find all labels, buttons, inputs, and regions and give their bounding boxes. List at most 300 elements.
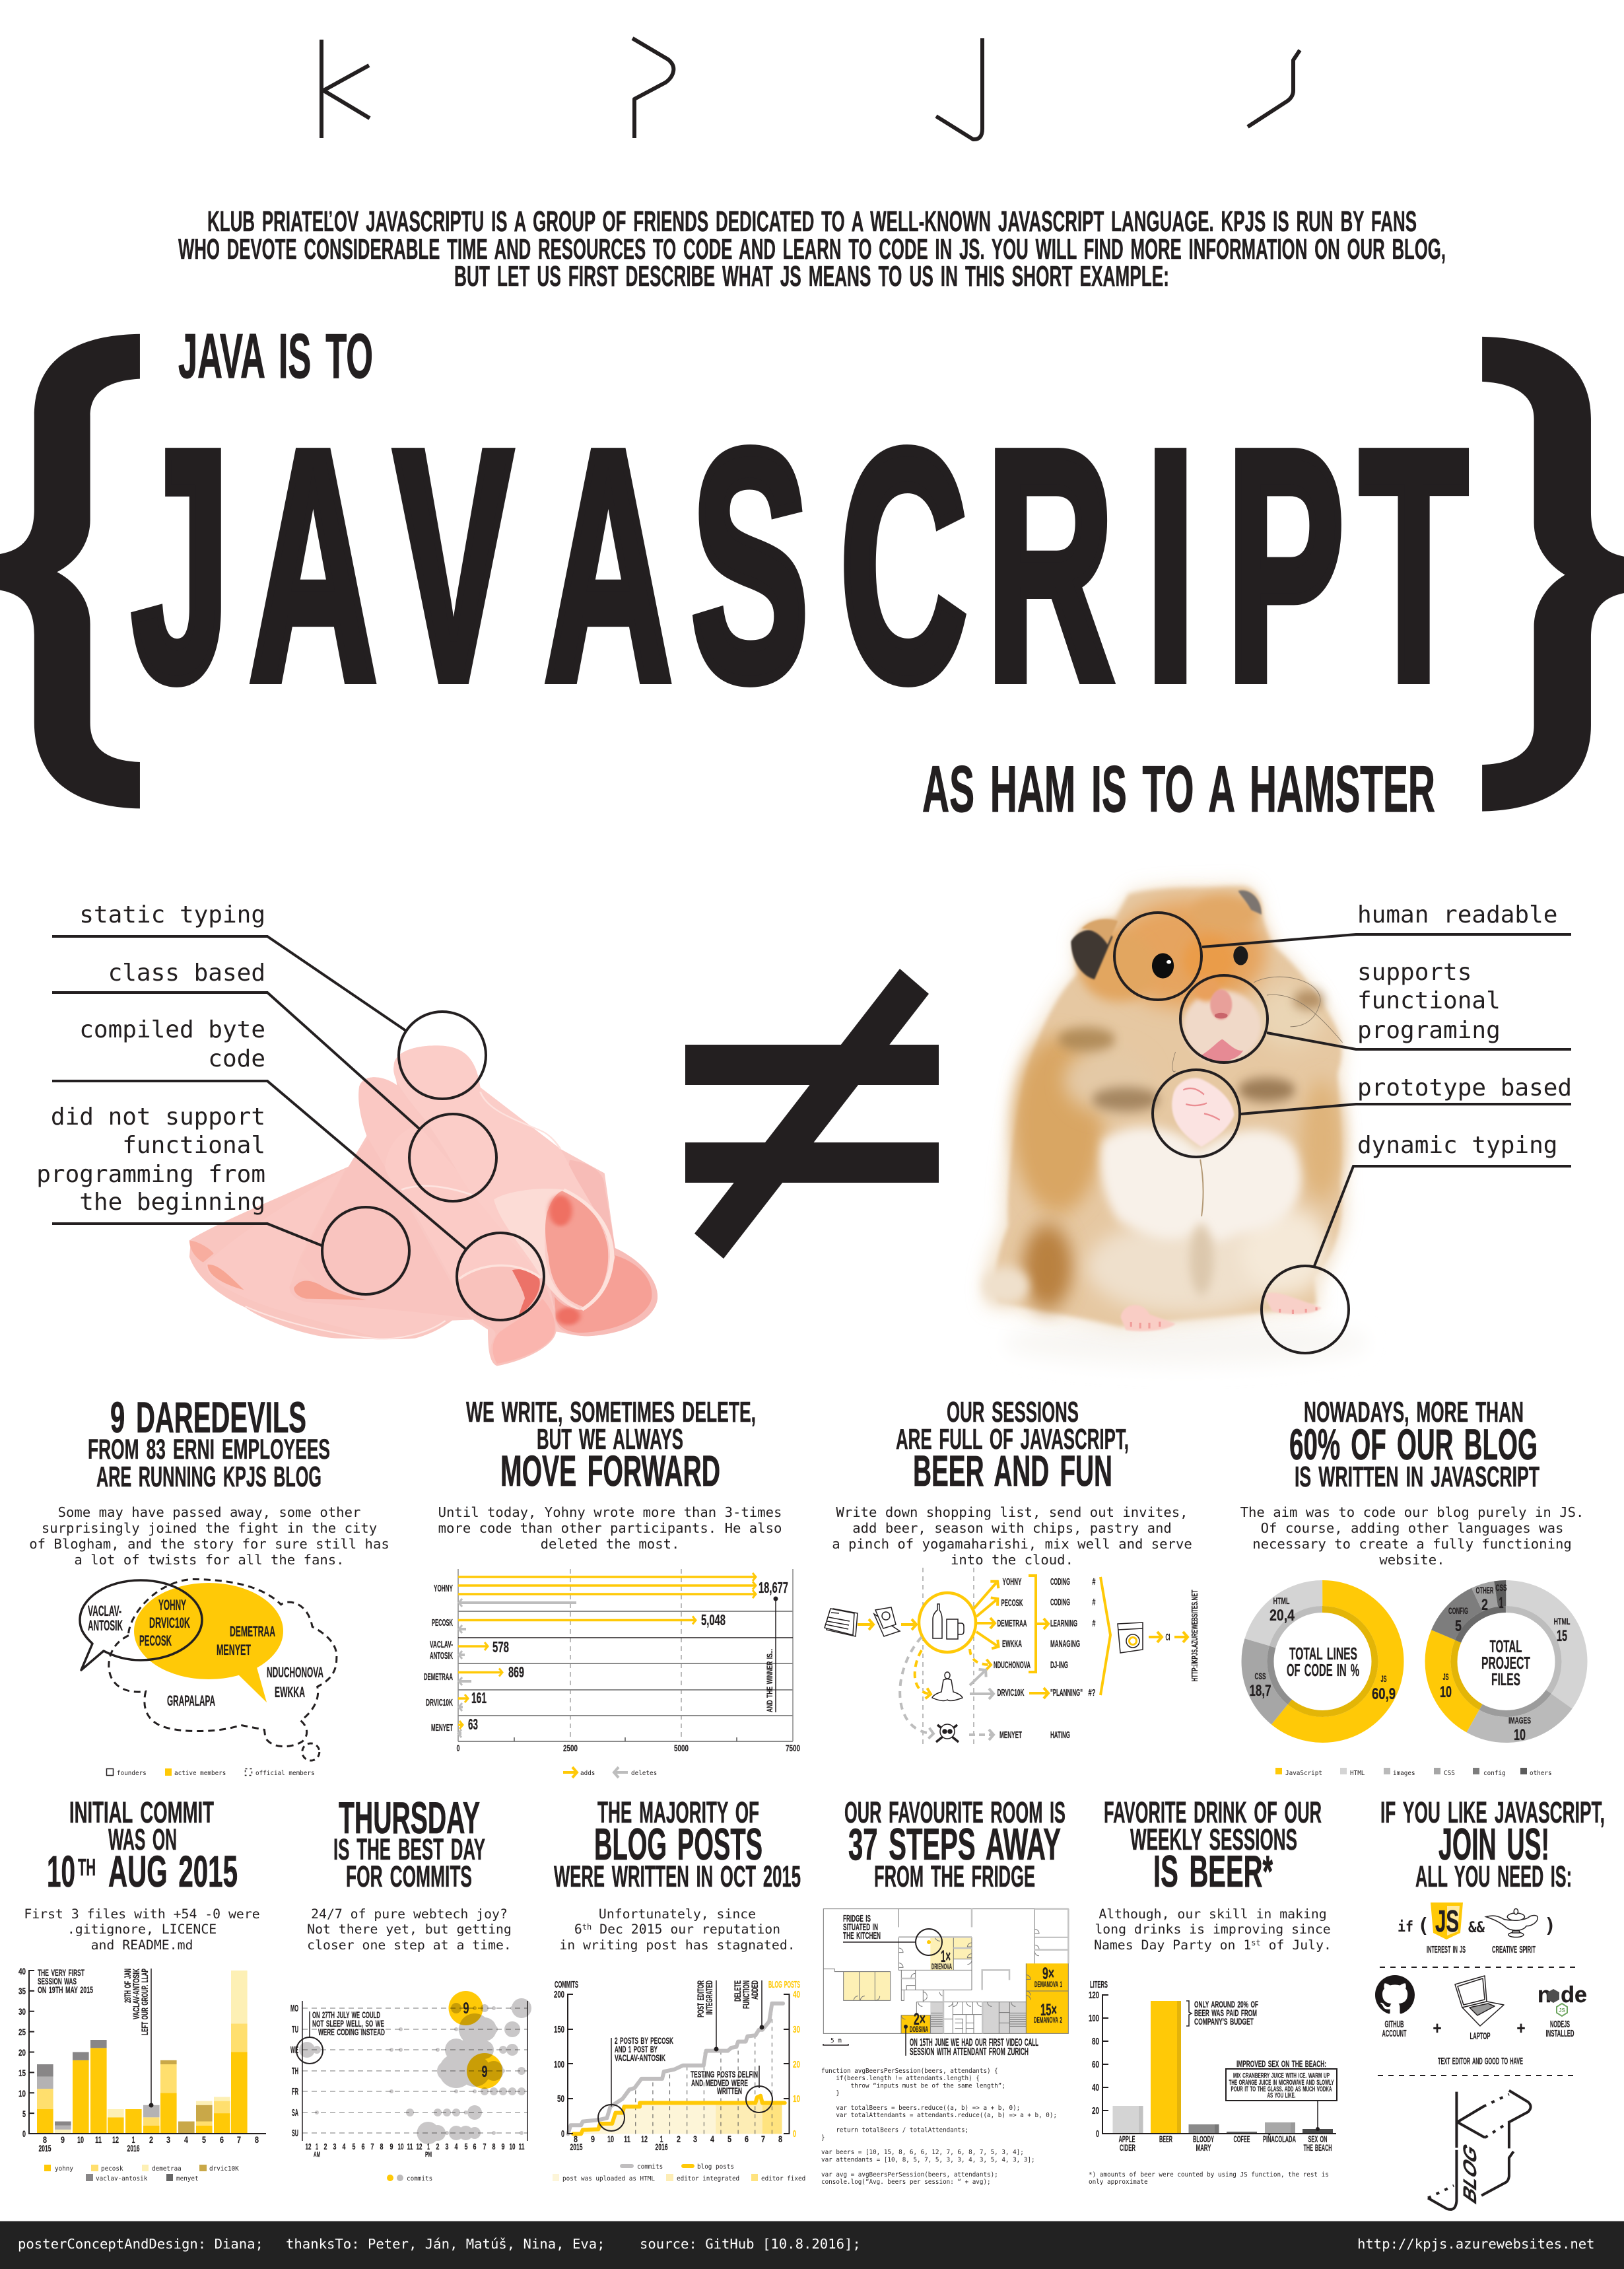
text block: Unfortunately, since	[599, 1906, 756, 1922]
annotation: testing posts	[691, 2066, 772, 2112]
stacked bar chart: monthly commits: 8	[43, 2134, 47, 2145]
flow diagram: session workflow: PECOSK	[1001, 1598, 1023, 1609]
bar chart: adds and deletes: DEMETRAA	[424, 1672, 453, 1683]
stacked bar chart: monthly commits: 40	[18, 1966, 26, 1976]
bar chart: liters per drink: MARY	[1196, 2142, 1211, 2153]
annotation: 2 posts by pecosk: VACLAV-ANTOSIK	[615, 2052, 665, 2063]
donut chart: total project files: 2	[1481, 1596, 1488, 1614]
callout: supports functional programing: functional	[1357, 987, 1501, 1014]
requirement: github laptop node: INSTALLED	[1546, 2028, 1574, 2039]
requirement: js and creative spirit: CREATIVE SPIRIT	[1492, 1944, 1536, 1955]
text block: Although, our skill in making	[1099, 1906, 1327, 1922]
annotation: testing posts: WRITTEN	[717, 2085, 742, 2096]
callout: improved sex on the beach	[1226, 2058, 1337, 2131]
annotation: company budget: ONLY AROUND 20% OF	[1194, 1999, 1258, 2009]
callout: supports functional programing: supports	[1357, 959, 1472, 986]
floor plan: DEMANOVA 1	[1034, 1980, 1062, 1989]
panel: thursday	[290, 1793, 531, 2182]
text block: The aim was to code our blog purely in JS.	[1240, 1504, 1584, 1520]
venn diagram: members: EWKKA	[275, 1684, 305, 1700]
logo: KPJS blog isometric	[1428, 2091, 1531, 2210]
line chart: commits and blog posts: 10	[793, 2093, 800, 2105]
requirement: js and creative spirit: INTEREST IN JS	[1427, 1944, 1466, 1955]
legend: blog posts	[553, 2163, 805, 2182]
heading: THE MAJORITY OF	[597, 1796, 759, 1829]
donut chart: total project files: JS	[1443, 1671, 1448, 1682]
flow diagram: session workflow: NDUCHONOVA	[994, 1660, 1031, 1671]
stacked bar chart: monthly commits: 2016	[127, 2143, 140, 2153]
stacked bar chart: monthly commits: 5	[202, 2134, 206, 2145]
donut chart: total project files: TOTAL	[1489, 1636, 1522, 1656]
stacked bar chart: monthly commits: 7	[237, 2134, 241, 2145]
text block: into the cloud.	[951, 1552, 1073, 1568]
text block: th	[582, 1922, 592, 1932]
stacked bar chart: monthly commits: 2015	[38, 2143, 51, 2153]
floor plan: 15×	[1040, 2001, 1057, 2019]
bar chart: adds and deletes: VACLAV-	[430, 1640, 453, 1650]
callout: improved sex on the beach: POUR IT TO THE GLASS. ADD AS MUCH VODKA	[1231, 2085, 1332, 2093]
donut chart: total lines of code: 20,4	[1269, 1607, 1295, 1624]
line chart: commits and blog posts: 40	[793, 1989, 800, 2000]
bar chart: liters per drink: BEER	[1159, 2134, 1172, 2144]
bubble chart: commits by hour: 5	[465, 2142, 467, 2151]
text block: necessary to create a fully functioning	[1252, 1536, 1572, 1552]
line chart: commits and blog posts: 0	[561, 2128, 564, 2140]
floor plan: SITUATED IN	[843, 1922, 878, 1933]
flow diagram: session workflow: HATING	[1050, 1730, 1070, 1741]
callout: compiled byte code: compiled byte	[79, 1016, 265, 1043]
line chart: commits and blog posts: 5	[727, 2134, 731, 2144]
flow diagram: session workflow: CODING	[1050, 1577, 1070, 1588]
illustration: hamster	[982, 886, 1369, 1365]
footer bar: source: GitHub [10.8.2016];	[640, 2236, 861, 2252]
legend: members: demetraa	[152, 2165, 182, 2173]
text block: .gitignore, LICENCE	[67, 1922, 217, 1937]
icon: JS shield: JS	[1435, 1904, 1459, 1938]
text block: website.	[1379, 1552, 1445, 1568]
callout: dynamic typing: dynamic typing	[1357, 1132, 1557, 1159]
code block	[821, 2068, 1057, 2186]
heading: THURSDAY	[339, 1793, 480, 1843]
text block: Not there yet, but getting	[307, 1922, 512, 1937]
bubble chart: commits by hour: TU	[292, 2024, 298, 2035]
annotation: delete function added: DELETE	[732, 1980, 743, 2002]
donut chart: total project files: HTML	[1554, 1616, 1571, 1626]
icon: meditation	[932, 1672, 963, 1700]
right curly brace	[1482, 337, 1624, 812]
panel: 60% of our blog	[1240, 1396, 1584, 1777]
ham callouts	[36, 901, 544, 1320]
flow diagram: session workflow: DRVIC10K	[997, 1688, 1025, 1698]
floor plan: 1×	[941, 1947, 951, 1966]
legend: languages: others	[1530, 1770, 1552, 1777]
bar chart: liters per drink: SEX ON	[1308, 2134, 1327, 2144]
heading: WAS ON	[108, 1823, 177, 1856]
heading: ARE FULL OF JAVASCRIPT,	[896, 1423, 1129, 1455]
legend: blog posts: blog posts	[697, 2163, 734, 2171]
callout: compiled byte code: code	[208, 1045, 265, 1072]
annotation: vaclav left: 28TH OF JAN	[122, 1969, 133, 2003]
line chart: commits and blog posts: 150	[554, 2024, 564, 2035]
annotation: 27th july: NOT SLEEP WELL, SO WE	[312, 2018, 384, 2029]
heading	[1380, 1796, 1605, 1893]
legend: languages: JavaScript	[1285, 1770, 1322, 1777]
bubble chart: commits by hour: 11	[407, 2142, 413, 2151]
callout: prototype based: prototype based	[1357, 1074, 1572, 1101]
bubble chart: commits by hour: 5	[353, 2142, 355, 2151]
bar chart: liters per drink: COFEE	[1233, 2134, 1250, 2144]
line chart: commits and blog posts: 2	[677, 2134, 681, 2144]
bar chart: adds and deletes: 869	[508, 1663, 524, 1681]
stacked bar chart: monthly commits: 30	[18, 2006, 26, 2017]
bar chart: adds and deletes: 18,677	[759, 1579, 788, 1596]
line chart: commits and blog posts: 11	[624, 2134, 630, 2144]
donut chart: total lines of code: 60,9	[1372, 1685, 1396, 1703]
intro text	[178, 205, 1446, 293]
panel: blog posts: BLOG POSTS	[768, 1979, 800, 1990]
text block: st	[1251, 1938, 1261, 1947]
flow diagram: session workflow: #?	[1088, 1688, 1096, 1698]
requirement: js and creative spirit	[1398, 1902, 1556, 1955]
callout: did not support functional programming: programming from	[36, 1161, 265, 1188]
line chart: commits and blog posts: 12	[641, 2134, 648, 2144]
bubble chart: commits by hour: 3	[333, 2142, 337, 2151]
floor plan: DRIENOVA	[931, 1962, 952, 1971]
flow diagram: session workflow: #	[1092, 1619, 1096, 1629]
stacked bar chart: monthly commits: 35	[18, 1986, 26, 1996]
footer bar: posterConceptAndDesign: Diana;	[18, 2236, 263, 2252]
heading: IS BEER*	[1153, 1846, 1273, 1897]
donut chart: total lines of code: HTML	[1273, 1595, 1290, 1606]
text block: more code than other participants. He also	[438, 1520, 782, 1536]
annotation: vaclav left: VACLAV-ANTOSIK	[131, 1969, 141, 2019]
stacked bar chart: monthly commits: 3	[166, 2134, 170, 2145]
text block: 6	[574, 1922, 582, 1937]
venn diagram: members: PECOSK	[139, 1632, 172, 1649]
bar chart: liters per drink: 0	[1096, 2128, 1099, 2140]
bubble chart: commits by hour: 4	[342, 2142, 346, 2151]
callout: did not support functional programming: did not support	[51, 1103, 265, 1131]
legend: adds and deletes: adds	[580, 1770, 595, 1777]
text block	[832, 1504, 1192, 1568]
bubble chart: commits by hour: TH	[292, 2066, 298, 2077]
legend: members: official members	[255, 1770, 315, 1777]
line chart: commits and blog posts: 20	[793, 2059, 800, 2070]
heading: 37 STEPS AWAY	[848, 1819, 1061, 1869]
line chart: commits and blog posts: 2016	[655, 2142, 668, 2152]
donut chart: total project files: 10	[1440, 1683, 1452, 1701]
venn diagram: members: MENYET	[217, 1642, 251, 1658]
callout: compiled byte code	[52, 1016, 544, 1320]
callout: class based	[52, 960, 496, 1201]
donut chart: total lines of code: 18,7	[1249, 1682, 1271, 1700]
bar chart: adds and deletes: 0	[457, 1743, 460, 1753]
heading	[844, 1796, 1066, 1893]
text block	[559, 1906, 795, 1953]
bar chart: adds and deletes: 63	[468, 1716, 478, 1733]
stacked bar chart: monthly commits: 11	[95, 2134, 102, 2145]
donut chart: total project files: 1	[1499, 1594, 1504, 1612]
venn diagram: members: GRAPALAPA	[167, 1693, 215, 1709]
floor plan: FRIDGE IS	[843, 1913, 871, 1924]
bubble chart: commits by hour: WE	[290, 2044, 298, 2056]
annotation: post editor integrated	[695, 1980, 718, 2051]
icon: github	[1375, 1975, 1415, 2014]
requirement: github laptop node: ACCOUNT	[1382, 2028, 1406, 2039]
bubble chart: commits by hour: 1	[427, 2142, 430, 2151]
bar chart: adds and deletes: 5,048	[701, 1611, 726, 1628]
bar chart: adds and deletes: 5000	[674, 1743, 689, 1753]
legend: members: menyet	[176, 2175, 199, 2182]
requirement: github laptop node: LAPTOP	[1470, 2031, 1491, 2042]
text block: a lot of twists for all the fans.	[74, 1552, 345, 1568]
bubble chart: commits by hour: 7	[483, 2142, 486, 2151]
heading: FROM THE FRIDGE	[874, 1860, 1035, 1893]
floor plan: THE KITCHEN	[843, 1930, 881, 1941]
icon: node logo: n de	[1538, 1982, 1587, 2007]
logo: KPJS letterforms	[321, 38, 1300, 139]
text block	[24, 1906, 260, 1953]
bar chart: liters per drink	[1089, 1979, 1337, 2153]
icon: laptop	[1455, 1976, 1504, 2026]
heading: ARE RUNNING KPJS BLOG	[96, 1461, 321, 1493]
donut chart: total lines of code: JS	[1381, 1673, 1386, 1684]
heading	[1104, 1796, 1322, 1897]
line chart: commits and blog posts: 8	[574, 2134, 578, 2144]
legend: adds and deletes: deletes	[631, 1770, 657, 1777]
line chart: commits and blog posts: 50	[557, 2093, 564, 2105]
requirement: js and creative spirit: )	[1544, 1914, 1556, 1937]
heading: IS THE BEST DAY	[333, 1833, 485, 1866]
legend: blog posts: post was uploaded as HTML	[562, 2175, 655, 2182]
floor plan: 2×	[914, 2010, 926, 2029]
left curly brace	[0, 334, 140, 808]
flow diagram: session workflow: CODING	[1050, 1597, 1070, 1608]
footnote: *) amounts of beer were counted by using JS function, the rest is	[1089, 2171, 1329, 2179]
callout: human readable: human readable	[1357, 901, 1557, 928]
bubble chart: commits by hour: 10	[397, 2142, 404, 2151]
heading: 9 DAREDEVILS	[110, 1393, 306, 1442]
panel: favorite drink	[1089, 1796, 1337, 2186]
bubble chart: commits by hour: 7	[371, 2142, 374, 2151]
callout: class based: class based	[108, 960, 265, 987]
annotation: 2 posts by pecosk: 2 POSTS BY PECOSK	[615, 2035, 673, 2046]
bar chart: adds and deletes: AND THE WINNER IS...	[765, 1649, 774, 1712]
stacked bar chart: monthly commits: 8	[255, 2134, 259, 2145]
bar chart: liters per drink: 40	[1092, 2082, 1099, 2093]
annotation: 2 posts by pecosk: AND 1 POST BY	[615, 2044, 658, 2054]
footer bar	[0, 2221, 1624, 2269]
bar chart: liters per drink: 100	[1089, 2013, 1099, 2024]
stacked bar chart: monthly commits: 10	[18, 2088, 26, 2099]
bar chart: liters per drink: LITERS	[1090, 1979, 1108, 1990]
annotation: 27th july: ON 27TH JULY WE COULD	[312, 2009, 380, 2020]
bar chart: adds and deletes: PECOSK	[432, 1618, 453, 1628]
bar chart: adds and deletes: YOHNY	[434, 1584, 453, 1594]
text block: Of course, adding other languages was	[1261, 1520, 1563, 1536]
stacked bar chart: monthly commits: 1	[132, 2134, 135, 2145]
bar chart: liters per drink: THE BEACH	[1303, 2142, 1332, 2153]
legend: members: active members	[174, 1770, 226, 1777]
legend: languages: CSS	[1444, 1770, 1455, 1777]
flow diagram: session workflow: LEARNING	[1050, 1619, 1077, 1629]
legend: members: vaclav-antosik	[96, 2175, 148, 2182]
bubble chart: commits by hour: SU	[292, 2128, 298, 2139]
annotation: testing posts: TESTING POSTS DELFIN	[691, 2069, 758, 2079]
requirement: js and creative spirit: if	[1398, 1919, 1413, 1936]
annotation: first session: SESSION WAS	[38, 1976, 77, 1986]
callout: prototype based	[1153, 1070, 1572, 1157]
callout: did not support functional programming	[36, 1103, 409, 1294]
donut chart: total lines of code: OF CODE IN %	[1287, 1660, 1359, 1680]
heading	[47, 1796, 238, 1897]
panel: initial commit	[18, 1796, 266, 2182]
flow diagram: session workflow: MENYET	[999, 1730, 1022, 1741]
callout: improved sex on the beach: MIX CRANBERRY JUICE WITH ICE. WARM UP	[1233, 2072, 1330, 2080]
donut chart: total project files: 15	[1557, 1627, 1567, 1645]
heading	[333, 1793, 485, 1893]
annotation: 2 posts by pecosk	[598, 2035, 673, 2131]
line chart: commits and blog posts: 4	[710, 2134, 714, 2144]
bar chart: adds and deletes: 2500	[563, 1743, 578, 1753]
bubble chart: commits by hour: 6	[473, 2142, 477, 2151]
text block	[1240, 1504, 1584, 1568]
not-equal sign	[685, 969, 939, 1259]
stacked bar chart: monthly commits: 0	[22, 2128, 26, 2139]
bubble chart: commits by hour: 10	[510, 2142, 515, 2151]
callout: did not support functional programming: functional	[122, 1132, 265, 1159]
legend: languages: HTML	[1350, 1770, 1365, 1777]
line chart: commits and blog posts: 10	[607, 2134, 614, 2144]
flow diagram: session workflow: #	[1092, 1577, 1096, 1588]
callout: supports functional programing	[1180, 959, 1571, 1063]
heading	[466, 1396, 756, 1495]
venn diagram: members	[80, 1580, 337, 1761]
annotation: vaclav left: LEFT OUR GROUP. LLAP	[139, 1969, 150, 2035]
bubble chart: commits by hour: PM	[425, 2151, 432, 2159]
bubble chart: commits by hour: 12	[305, 2142, 312, 2151]
text block: long drinks is improving since	[1095, 1922, 1331, 1937]
donut chart: total project files: 5	[1455, 1617, 1462, 1635]
subheading: java is to: JAVA IS TO	[178, 321, 373, 392]
legend: adds and deletes	[563, 1770, 657, 1777]
annotation: company budget: COMPANY'S BUDGET	[1194, 2016, 1254, 2027]
requirement: github laptop node: NODEJS	[1550, 2019, 1570, 2030]
annotation: 27th july	[296, 2009, 385, 2064]
floor plan: 5 m	[830, 2037, 842, 2044]
donut chart: total project files	[1438, 1582, 1574, 1744]
annotation: first session	[38, 1967, 93, 1995]
stacked bar chart: monthly commits: 6	[220, 2134, 224, 2145]
heading: FROM 83 ERNI EMPLOYEES	[88, 1434, 330, 1465]
heading: OUR SESSIONS	[947, 1396, 1079, 1428]
stacked bar chart: monthly commits: 4	[184, 2134, 188, 2145]
text block: add beer, season with chips, pastry and	[852, 1520, 1172, 1536]
icon: envelope	[874, 1607, 900, 1636]
code block: return totalBeers / totalAttendants;	[821, 2127, 968, 2134]
requirement: js and creative spirit: &&	[1468, 1920, 1485, 1936]
bubble chart: commits by hour: 11	[519, 2142, 524, 2151]
text block: surprisingly joined the fight in the city	[42, 1520, 377, 1536]
donut chart: total project files: IMAGES	[1508, 1715, 1531, 1726]
donut chart: total project files: CONFIG	[1448, 1605, 1468, 1616]
panel: blog posts	[553, 1796, 805, 2182]
bar chart: adds and deletes: MENYET	[431, 1723, 453, 1733]
flow diagram: session workflow: DJ-ING	[1050, 1660, 1068, 1671]
footnote	[1089, 2171, 1329, 2186]
line chart: commits and blog posts: 7	[761, 2134, 765, 2144]
stacked bar chart: monthly commits: 20	[18, 2047, 26, 2058]
bar chart: adds and deletes: 578	[492, 1638, 509, 1656]
bar chart: adds and deletes	[424, 1569, 800, 1753]
requirement: github laptop node: +	[1517, 2018, 1525, 2038]
flow diagram: session workflow	[825, 1568, 1200, 1745]
venn diagram: members: YOHNY	[158, 1597, 186, 1613]
bubble chart: commits by hour: 8	[380, 2142, 383, 2151]
heading: WERE WRITTEN IN OCT 2015	[554, 1860, 801, 1893]
text block: a pinch of yogamaharishi, mix well and serve	[832, 1536, 1192, 1552]
heading: FAVORITE DRINK OF OUR	[1104, 1796, 1322, 1829]
line chart: commits and blog posts	[554, 1979, 800, 2152]
heading: FOR COMMITS	[346, 1860, 472, 1893]
icon: genie lamp	[1486, 1908, 1538, 1937]
donut chart: total project files: CSS	[1496, 1582, 1506, 1593]
donut chart: total lines of code: TOTAL LINES	[1289, 1644, 1357, 1663]
callout: did not support functional programming: the beginning	[79, 1189, 265, 1216]
footer bar: thanksTo: Peter, Ján, Matúš, Nina, Eva;	[286, 2236, 605, 2252]
text block: Some may have passed away, some other	[58, 1504, 360, 1520]
flow diagram: session workflow: EWKKA	[1002, 1639, 1022, 1650]
code block: }	[821, 2134, 825, 2142]
flow diagram: session workflow: HTTP://KPJS.AZUREWEBSITES.NET	[1190, 1589, 1200, 1681]
floor plan: SESSION WITH ATTENDANT FROM ZURICH	[910, 2046, 1029, 2058]
annotation: 27th july: WERE CODING INSTEAD	[318, 2027, 385, 2037]
line chart: commits and blog posts: COMMITS	[555, 1979, 578, 1990]
code block: var avg = avgBeersPerSession(beers, attendants);	[821, 2171, 998, 2179]
line chart: commits and blog posts: 9	[591, 2134, 595, 2144]
legend: members: pecosk	[101, 2165, 123, 2173]
annotation: delete function added	[732, 1980, 764, 2030]
bubble chart: commits by hour: 2	[323, 2142, 327, 2151]
line chart: commits and blog posts: 6	[745, 2134, 749, 2144]
text block	[1094, 1906, 1332, 1953]
bubble chart: commits by hour: AM	[314, 2151, 320, 2159]
stacked bar chart: monthly commits: 25	[18, 2027, 26, 2037]
icon: washing machine	[1118, 1623, 1143, 1653]
text block: closer one step at a time.	[307, 1937, 512, 1953]
annotation: company budget: BEER WAS PAID FROM	[1194, 2007, 1257, 2018]
bubble chart: commits by hour: 9	[463, 2000, 469, 2017]
legend: languages: images	[1393, 1770, 1415, 1777]
callout: static typing	[52, 901, 486, 1099]
code block: console.log(“Avg. beers per session: “ + avg);	[821, 2179, 991, 2186]
line chart: commits and blog posts: 100	[554, 2059, 564, 2070]
bubble chart: commits by hour: 9	[502, 2142, 504, 2151]
legend: blog posts: commits	[637, 2163, 663, 2171]
icon: beer circle	[919, 1593, 976, 1652]
bubble chart: commits by hour: 2	[436, 2142, 440, 2151]
annotation: company budget	[1186, 1999, 1258, 2027]
annotation: first session: THE VERY FIRST	[38, 1967, 85, 1978]
venn diagram: members: ANTOSIK	[88, 1617, 123, 1634]
venn diagram: members: DEMETRAA	[230, 1623, 275, 1640]
text block: of July.	[1261, 1937, 1332, 1953]
icon: JS shield	[1431, 1902, 1463, 1939]
donut chart: total project files: FILES	[1491, 1669, 1520, 1689]
text block: Names Day Party on 1	[1094, 1937, 1251, 1953]
code block: if(beers.length != attendants.length) {	[821, 2075, 980, 2082]
text block	[307, 1906, 512, 1953]
